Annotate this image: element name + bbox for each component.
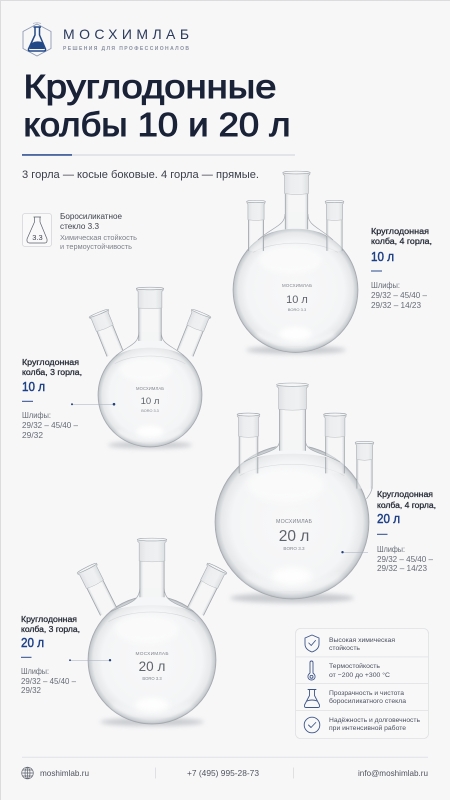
flask label: МОСХИМЛАБ: [136, 651, 168, 657]
label: 4 necks 10 L: колба, 4 горла,: [371, 236, 432, 246]
glass note description: [60, 234, 137, 251]
flask label: [276, 519, 313, 551]
flask label: [136, 651, 168, 681]
label: 4 necks 20 L: Круглодонная: [377, 489, 433, 499]
glass note description: Химическая стойкость: [60, 234, 137, 242]
flask label: 10 л: [141, 396, 159, 407]
glass note description: и термоустойчивость: [60, 243, 132, 251]
label: 3 necks 20 L: [21, 614, 80, 695]
flask label: BORO 3.3: [141, 409, 159, 413]
label: 3 necks 10 L: 29/32: [22, 431, 43, 440]
label: 3 necks 10 L: колба, 3 горла,: [22, 367, 82, 377]
label: 4 necks 10 L: Круглодонная: [371, 226, 429, 236]
flask label: BORO 3.3: [288, 307, 307, 312]
title: [24, 69, 290, 144]
flask label: 20 л: [279, 528, 309, 545]
label: 3 necks 10 L: Круглодонная: [22, 357, 79, 367]
flask label: BORO 3.3: [283, 546, 305, 551]
property: transparency: боросиликатного стекла: [329, 697, 406, 705]
property: durability: Надёжность и долговечность: [329, 717, 420, 724]
leader line: 4 necks 20 L: [341, 551, 368, 553]
property: heat resistance: Термостойкость: [329, 662, 380, 670]
label: 4 necks 10 L: [371, 226, 432, 310]
property: durability: [329, 717, 420, 732]
glass note heading: Боросиликатное: [60, 212, 123, 221]
label: 3 necks 20 L: 29/32 – 45/40 –: [21, 677, 77, 686]
email: info@moshimlab.ru: [358, 768, 428, 778]
flask label: 20 л: [139, 659, 165, 674]
phone: +7 (495) 995-28-73: [187, 768, 259, 778]
icon: globe: [22, 767, 33, 779]
flask: 3 necks 20 L: [77, 538, 227, 726]
label: 3 necks 20 L: 20 л: [21, 636, 44, 650]
property: transparency: [329, 690, 406, 705]
label: 3 necks 20 L: Круглодонная: [21, 614, 77, 624]
label: 4 necks 20 L: 29/32 – 45/40 –: [377, 555, 434, 564]
label: 4 necks 20 L: колба, 4 горла,: [377, 500, 436, 510]
property: chemical resistance: стойкость: [329, 644, 360, 652]
icon: check circle: [304, 717, 320, 733]
icon: borosilicate flask 3.3: 3.3: [32, 233, 43, 242]
label: 4 necks 20 L: 20 л: [377, 512, 400, 526]
property: durability: при интенсивной работе: [329, 724, 406, 732]
flask label: МОСХИМЛАБ: [136, 386, 164, 391]
icon: thermometer: [308, 661, 315, 680]
label: 4 necks 10 L: 29/32 – 45/40 –: [371, 291, 428, 300]
label: 4 necks 20 L: 29/32 – 14/23: [377, 564, 427, 573]
flask label: МОСХИМЛАБ: [276, 519, 313, 525]
flask label: [282, 283, 312, 312]
flask label: МОСХИМЛАБ: [282, 283, 312, 288]
logo tagline: РЕШЕНИЯ ДЛЯ ПРОФЕССИОНАЛОВ: [63, 46, 189, 52]
website: moshimlab.ru: [40, 768, 89, 778]
label: 3 necks 10 L: [22, 357, 82, 440]
title divider: [22, 154, 295, 156]
icon: flask: [304, 690, 320, 708]
label: 4 necks 20 L: [377, 489, 436, 573]
glass note heading: [60, 212, 123, 231]
logo wordmark: МОСХИМЛАБ: [63, 26, 189, 42]
flask: 3 necks 10 L: [89, 287, 211, 448]
leader line: 3 necks 20 L: [69, 659, 111, 661]
icon: logo hexagon flask: [23, 23, 51, 56]
title: Круглодонные: [24, 69, 276, 106]
flask label: BORO 3.3: [142, 676, 162, 681]
property: chemical resistance: Высокая химическая: [329, 637, 395, 644]
property: transparency: Прозрачность и чистота: [329, 690, 404, 697]
footer: [22, 757, 428, 779]
flask label: 10 л: [286, 294, 308, 306]
property: heat resistance: от −200 до +300 °C: [329, 671, 390, 679]
label: 3 necks 20 L: колба, 3 горла,: [21, 624, 80, 634]
logo: [23, 23, 189, 56]
label: 3 necks 10 L: 10 л: [22, 380, 45, 394]
subtitle: 3 горла — косые боковые. 4 горла — прямые.: [22, 169, 259, 181]
property: heat resistance: [329, 662, 390, 679]
flask: 4 necks 20 L: [215, 383, 374, 603]
label: 4 necks 10 L: 29/32 – 14/23: [371, 301, 421, 310]
glass note heading: стекло 3.3: [60, 222, 100, 231]
icon: shield: [305, 635, 319, 652]
flask: 4 necks 10 L: [233, 171, 358, 354]
label: 4 necks 20 L: Шлифы:: [377, 545, 405, 554]
flask label: [136, 386, 164, 413]
leader line: 3 necks 10 L: [71, 403, 115, 406]
label: 3 necks 20 L: Шлифы:: [21, 667, 49, 676]
label: 3 necks 20 L: 29/32: [21, 686, 41, 695]
glass material note: [22, 212, 137, 251]
label: 3 necks 10 L: Шлифы:: [22, 411, 51, 420]
label: 4 necks 10 L: Шлифы:: [371, 281, 400, 290]
label: 4 necks 10 L: 10 л: [371, 250, 394, 264]
panel: properties: [296, 628, 428, 738]
title: колбы 10 и 20 л: [24, 107, 290, 144]
label: 3 necks 10 L: 29/32 – 45/40 –: [22, 421, 79, 430]
property: chemical resistance: [329, 637, 395, 652]
